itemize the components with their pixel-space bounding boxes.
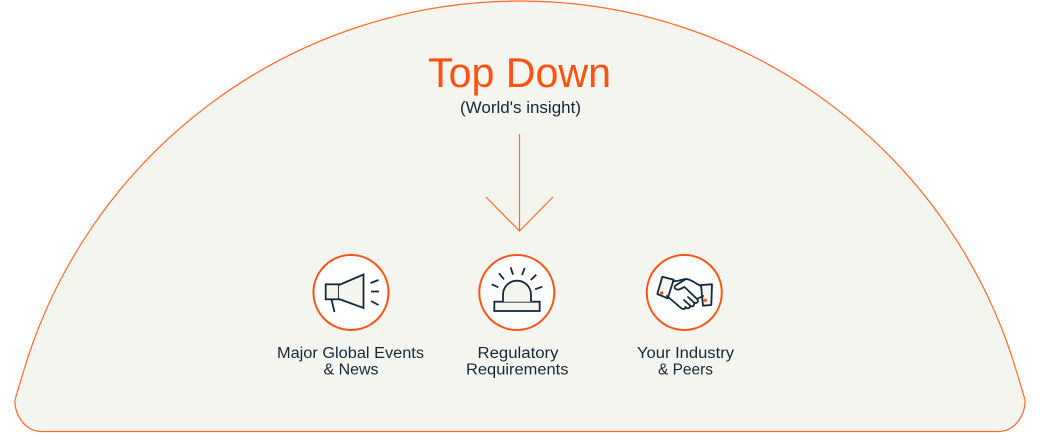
icon: siren <box>479 255 554 330</box>
item: your industry and peers <box>637 255 738 378</box>
label: major global events and news: Major Global Events <box>277 345 424 362</box>
subtitle: (World's insight) <box>460 99 581 117</box>
title: Top Down <box>428 49 611 96</box>
label: your industry and peers: Your Industry <box>637 345 734 362</box>
label: major global events and news: & News <box>324 362 379 378</box>
item: major global events <box>277 255 428 378</box>
item: regulatory requirements <box>466 255 569 378</box>
arrow: downward <box>486 134 553 231</box>
icon: megaphone <box>314 255 388 330</box>
label: regulatory requirements: Requirements <box>466 362 569 378</box>
icon: handshake <box>647 255 722 330</box>
label: your industry and peers: & Peers <box>658 362 713 378</box>
label: regulatory requirements: Regulatory <box>478 345 559 362</box>
